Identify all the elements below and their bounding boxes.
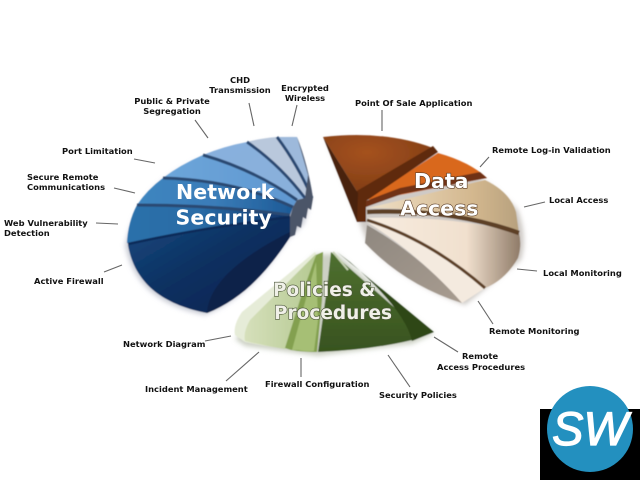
label: Firewall Configuration (265, 358, 370, 389)
label: Web Vulnerability Detection: Detection (4, 228, 50, 238)
slice: mid green (285, 252, 323, 352)
label: Web Vulnerability Detection (4, 218, 118, 238)
label: Port Limitation: Port Limitation (62, 146, 133, 156)
panel: policies and procedures pie slice (235, 252, 434, 356)
slice: orange (365, 153, 487, 200)
slice: cream (367, 218, 520, 288)
label: Active Firewall (34, 265, 122, 286)
title: Data Access (400, 169, 478, 220)
label: Network Diagram: Network Diagram (123, 339, 206, 349)
title: Network Security: Security (176, 206, 272, 230)
title: Network Security: Network (176, 180, 276, 204)
label: Web Vulnerability Detection: Web Vulnerability (4, 218, 88, 228)
slice: pale green rim (235, 252, 318, 348)
label: Remote Monitoring: Remote Monitoring (489, 326, 580, 336)
label: Remote Monitoring (478, 301, 580, 336)
badge: SW logo: SW (552, 402, 632, 455)
slice: lightest blue edge (277, 137, 313, 198)
label: Active Firewall: Active Firewall (34, 276, 104, 286)
slice: navy (128, 217, 290, 313)
label: Network Diagram (123, 336, 231, 349)
label: Encrypted Wireless (281, 83, 329, 126)
slice: deep blue (127, 205, 290, 243)
label: Point Of Sale Application (355, 98, 473, 131)
title: Network Security (176, 180, 276, 230)
slice: blue (137, 178, 293, 215)
slice: tan (368, 180, 519, 233)
label: Security Policies (379, 355, 457, 400)
label: Firewall Configuration: Firewall Configuration (265, 379, 370, 389)
title: Data Access: Data (414, 169, 468, 193)
slice: dark wedge (207, 232, 290, 313)
label: CHD Transmission: Transmission (209, 85, 271, 95)
badge: SW logo (540, 386, 640, 480)
label: Local Monitoring: Local Monitoring (543, 268, 622, 278)
label: Encrypted Wireless: Encrypted (281, 83, 329, 93)
title: Policies and Procedures (273, 280, 392, 324)
panel: data access pie slice (323, 135, 524, 305)
title: Policies and Procedures: Procedures (274, 303, 392, 324)
label: Secure Remote Communications: Secure Remote (27, 172, 99, 182)
title: Data Access: Access (400, 196, 478, 220)
label: Incident Management (145, 352, 259, 394)
slice: light band (367, 222, 485, 303)
label: Security Policies: Security Policies (379, 390, 457, 400)
slice: dark green main (318, 252, 420, 352)
label: Public and Private Segregation: Public & Private (134, 96, 210, 106)
label: Remote Log-in Validation (480, 145, 611, 167)
label: Secure Remote Communications (27, 172, 135, 193)
label: Public and Private Segregation: Segregation (143, 106, 201, 116)
slice: medium light blue (203, 142, 305, 200)
label: Port Limitation (62, 146, 155, 163)
slice: grey band (365, 225, 462, 303)
label: Encrypted Wireless: Wireless (285, 93, 325, 103)
label: Remote Access Procedures: Access Procedures (437, 362, 525, 372)
label: Local Access: Local Access (549, 195, 608, 205)
label: CHD Transmission: CHD (230, 75, 250, 85)
slice: brown (323, 135, 433, 193)
slice: pale blue (247, 137, 312, 198)
title: Policies and Procedures: Policies & (273, 280, 375, 301)
label: Remote Access Procedures (434, 337, 525, 372)
label: Public and Private Segregation (134, 96, 210, 138)
label: Remote Access Procedures: Remote (462, 351, 498, 361)
label: Secure Remote Communications: Communications (27, 182, 105, 192)
slice: light green (245, 254, 316, 349)
slice: dark stepped side (290, 137, 313, 237)
slice: medium blue (163, 155, 297, 207)
label: Local Access (524, 195, 608, 207)
slice: dark green edge (337, 252, 434, 341)
label: Remote Log-in Validation: Remote Log-in Validation (492, 145, 611, 155)
panel: network security pie slice (125, 137, 313, 315)
label: CHD Transmission (209, 75, 271, 126)
label: Point Of Sale Application: Point Of Sale Application (355, 98, 473, 108)
label: Incident Management: Incident Management (145, 384, 248, 394)
